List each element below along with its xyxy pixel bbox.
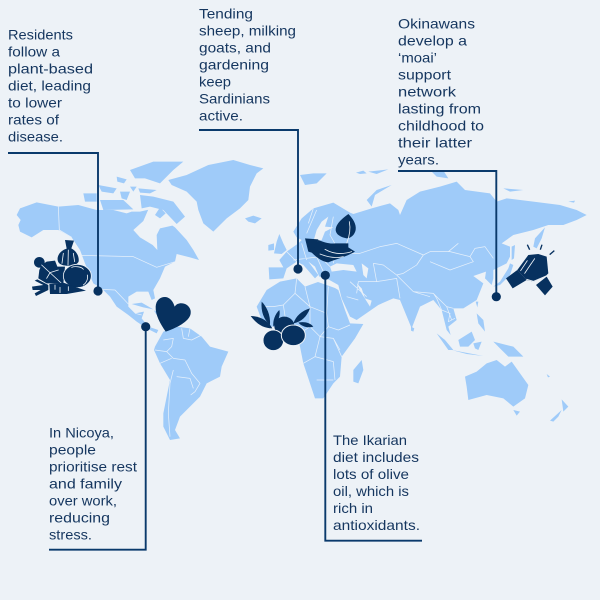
text: Loma Linda: diet, leading xyxy=(8,77,91,93)
seas xyxy=(313,217,372,307)
text: Okinawa: support xyxy=(398,66,451,82)
icon: raised fist xyxy=(506,245,554,295)
text: Nicoya: reducing xyxy=(49,509,110,525)
text: Nicoya: stress. xyxy=(49,526,92,542)
text: Okinawa: their latter xyxy=(398,134,472,150)
text: Loma Linda: plant-based xyxy=(8,60,93,76)
text: Okinawa: lasting from xyxy=(398,100,481,116)
text: Loma Linda: Residents xyxy=(8,26,73,42)
connector: Nicoya xyxy=(49,322,150,550)
icon: olives xyxy=(251,302,313,351)
text: Nicoya: prioritise rest xyxy=(49,458,137,474)
text: Sardinia: sheep, milking xyxy=(199,22,296,38)
map: North America xyxy=(14,162,199,333)
icon: heart xyxy=(156,297,191,332)
map: South America xyxy=(154,327,228,440)
text: Nicoya xyxy=(49,424,137,542)
map: Japan and Pacific Asia xyxy=(411,227,545,357)
map: Australia and New Zealand xyxy=(465,360,568,422)
text: Loma Linda: rates of xyxy=(8,111,59,127)
text: Sardinia: active. xyxy=(199,107,243,123)
text: Ikaria: diet includes xyxy=(333,449,419,465)
connector: Loma Linda xyxy=(8,153,103,296)
text: Ikaria: rich in xyxy=(333,500,373,516)
text: Nicoya: over work, xyxy=(49,492,117,508)
text: Nicoya: and family xyxy=(49,475,122,491)
text: Sardinia: goats, and xyxy=(199,39,271,55)
text: Sardinia: Tending xyxy=(199,5,253,21)
text: Nicoya: In Nicoya, xyxy=(49,424,114,440)
text: Okinawa: childhood to xyxy=(398,117,484,133)
text: Ikaria xyxy=(333,432,420,533)
text: Okinawa: Okinawans xyxy=(398,15,475,31)
map: Eurasia xyxy=(268,182,587,335)
text: Sardinia: gardening xyxy=(199,56,269,72)
connector: Ikaria xyxy=(321,271,422,541)
text: Ikaria: lots of olive xyxy=(333,466,409,482)
connector: Sardinia xyxy=(199,130,303,274)
connector: Okinawa xyxy=(398,171,501,301)
text: Okinawa: ‘moai’ xyxy=(398,49,437,65)
icon: vegetables xyxy=(32,240,91,296)
text: Sardinia xyxy=(199,5,296,123)
map: Greenland and Iceland xyxy=(168,160,263,232)
map: arctic islands xyxy=(300,169,575,207)
text: Sardinia: Sardinians xyxy=(199,90,270,106)
text: Okinawa: develop a xyxy=(398,32,467,48)
world map xyxy=(14,160,587,440)
icon: hand holding plant xyxy=(305,214,356,262)
text: Okinawa xyxy=(398,15,484,167)
text: Ikaria: antioxidants. xyxy=(333,517,420,533)
text: Okinawa: years. xyxy=(398,151,439,167)
text: Ikaria: oil, which is xyxy=(333,483,409,499)
map: Africa xyxy=(257,278,363,398)
text: Loma Linda: follow a xyxy=(8,43,60,59)
text: Okinawa: network xyxy=(398,83,457,99)
text: Sardinia: keep xyxy=(199,73,231,89)
text: Loma Linda xyxy=(8,26,93,144)
text: Nicoya: people xyxy=(49,441,96,457)
text: Loma Linda: to lower xyxy=(8,94,62,110)
text: Loma Linda: disease. xyxy=(8,128,63,144)
text: Ikaria: The Ikarian xyxy=(333,432,407,448)
